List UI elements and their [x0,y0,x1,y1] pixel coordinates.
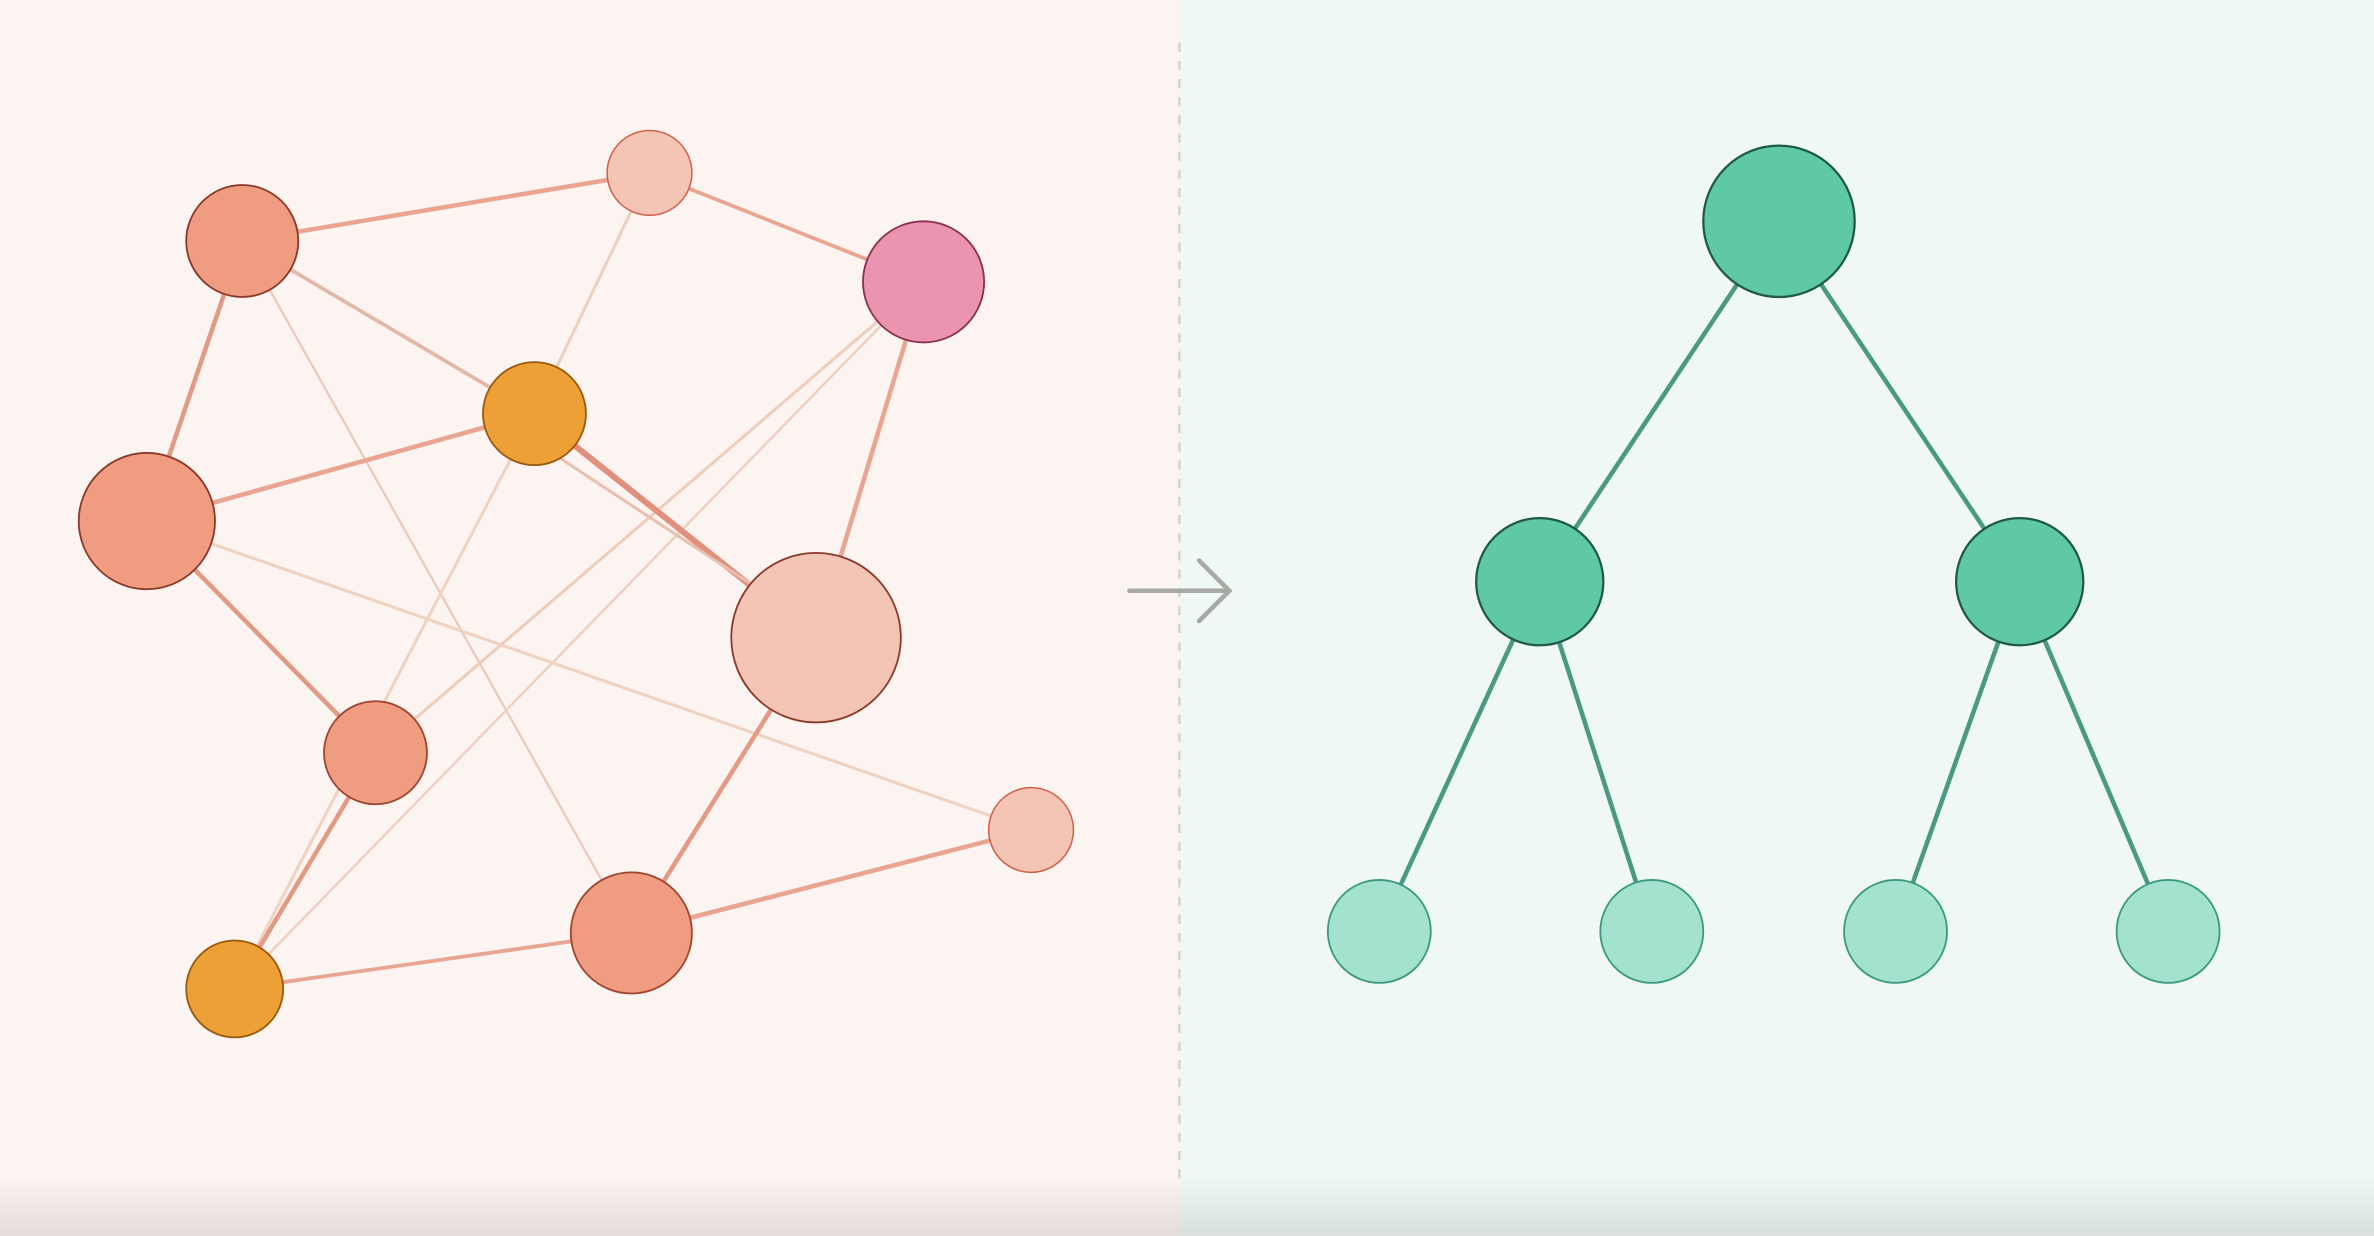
tree leaf 1 [1328,880,1431,983]
tree root [1703,146,1855,297]
arrow [1129,560,1229,621]
node: large light [731,553,901,722]
node: top small [607,130,692,215]
tree child right [1956,518,2083,645]
node: right small [989,788,1073,872]
tree child left [1476,518,1603,645]
node: left large [79,453,215,589]
node: orange center [483,362,586,465]
node: mid-left [324,701,427,804]
tree [1328,146,2220,983]
panel: tree background [1179,0,2374,1236]
tree leaf 3 [1844,880,1947,983]
network graph [79,130,1073,1037]
node: pink [863,221,984,342]
node: bottom [571,872,692,993]
tree leaf 4 [2117,880,2220,983]
node: orange bottom [186,940,283,1037]
panel: network background [0,0,1179,1236]
tree leaf 2 [1600,880,1703,983]
node: top-left [186,185,298,297]
